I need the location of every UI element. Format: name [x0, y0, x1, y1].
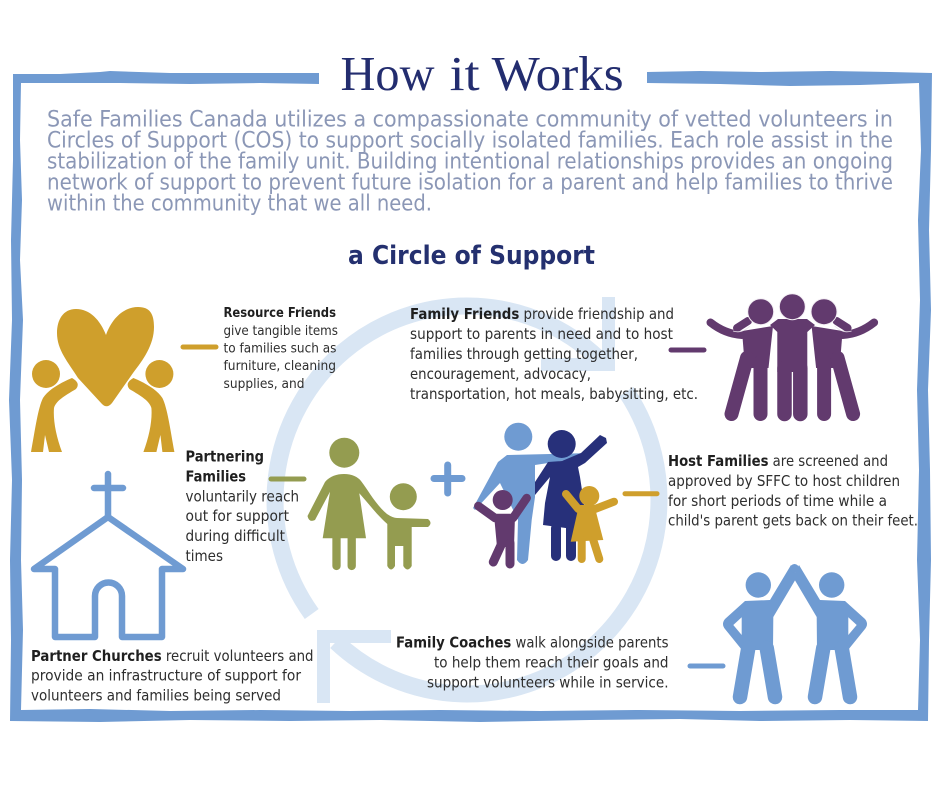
text: host families: for short periods of time while a [668, 492, 887, 510]
text: partnering families: times [186, 547, 223, 565]
connector: host families [625, 491, 657, 496]
text: partnering families: voluntarily reach [186, 488, 299, 506]
text: family friends: transportation, hot meals, babysitting, etc. [410, 385, 698, 403]
text: host families [668, 452, 918, 530]
intro paragraph: Circles of Support (COS) to support socially isolated families. Each role assist in the [47, 128, 893, 154]
text: partnering families [186, 448, 299, 565]
intro paragraph [47, 108, 893, 216]
text: family friends: encouragement, advocacy, [410, 365, 591, 383]
text: family coaches: to help them reach their goals and [434, 654, 668, 672]
icon: family friends trio [710, 294, 874, 414]
connector: partnering families [271, 476, 304, 482]
text: resource friends: give tangible items [224, 323, 338, 339]
connector: resource friends [183, 344, 216, 350]
text: partner churches: provide an infrastructure of support for [31, 667, 302, 685]
text: resource friends: to families such as [224, 340, 336, 356]
text: family coaches: support volunteers while in service. [427, 674, 668, 692]
text: resource friends [224, 305, 338, 392]
text: family coaches: Family Coaches walk alongside parents [396, 634, 668, 652]
icon: family coaches high five [723, 564, 867, 697]
icon: parent and child [308, 438, 430, 570]
text: partnering families: out for support [186, 507, 289, 525]
title: How [340, 46, 435, 101]
text: family friends: families through getting together, [410, 345, 638, 363]
text: partnering families: during difficult [186, 527, 285, 545]
text: family friends: support to parents in need and to host [410, 325, 673, 343]
icon: resource friends heart [31, 307, 174, 452]
icon: host family [473, 423, 614, 564]
text: resource friends: furniture, cleaning [224, 358, 336, 374]
text: partner churches: Partner Churches recruit volunteers and [31, 647, 314, 665]
intro paragraph: Safe Families Canada utilizes a compassionate community of vetted volunteers in [47, 108, 893, 132]
text: partnering families: Partnering [186, 448, 264, 466]
title: it [450, 46, 480, 101]
connector: family coaches [690, 664, 723, 668]
heading: a Circle of Support: a Circle of Support [348, 241, 595, 271]
title [340, 46, 624, 101]
text: family friends: Family Friends provide friendship and [410, 305, 674, 323]
title: Works [492, 46, 624, 101]
text: partner churches [31, 647, 314, 705]
text: partnering families: Families [186, 468, 246, 486]
text: host families: approved by SFFC to host children [668, 472, 900, 490]
text: host families: Host Families are screened and [668, 452, 888, 470]
connector: family friends [671, 348, 704, 352]
text: resource friends: supplies, and [224, 376, 304, 392]
icon: church [34, 474, 183, 637]
text: family coaches [396, 634, 668, 692]
text: partner churches: volunteers and families being served [31, 687, 281, 705]
icon: plus [434, 465, 462, 493]
intro paragraph: within the community that we all need. [47, 192, 432, 216]
cycle arrows [275, 297, 659, 703]
text: resource friends: Resource Friends [224, 305, 336, 321]
text: family friends [410, 305, 698, 403]
